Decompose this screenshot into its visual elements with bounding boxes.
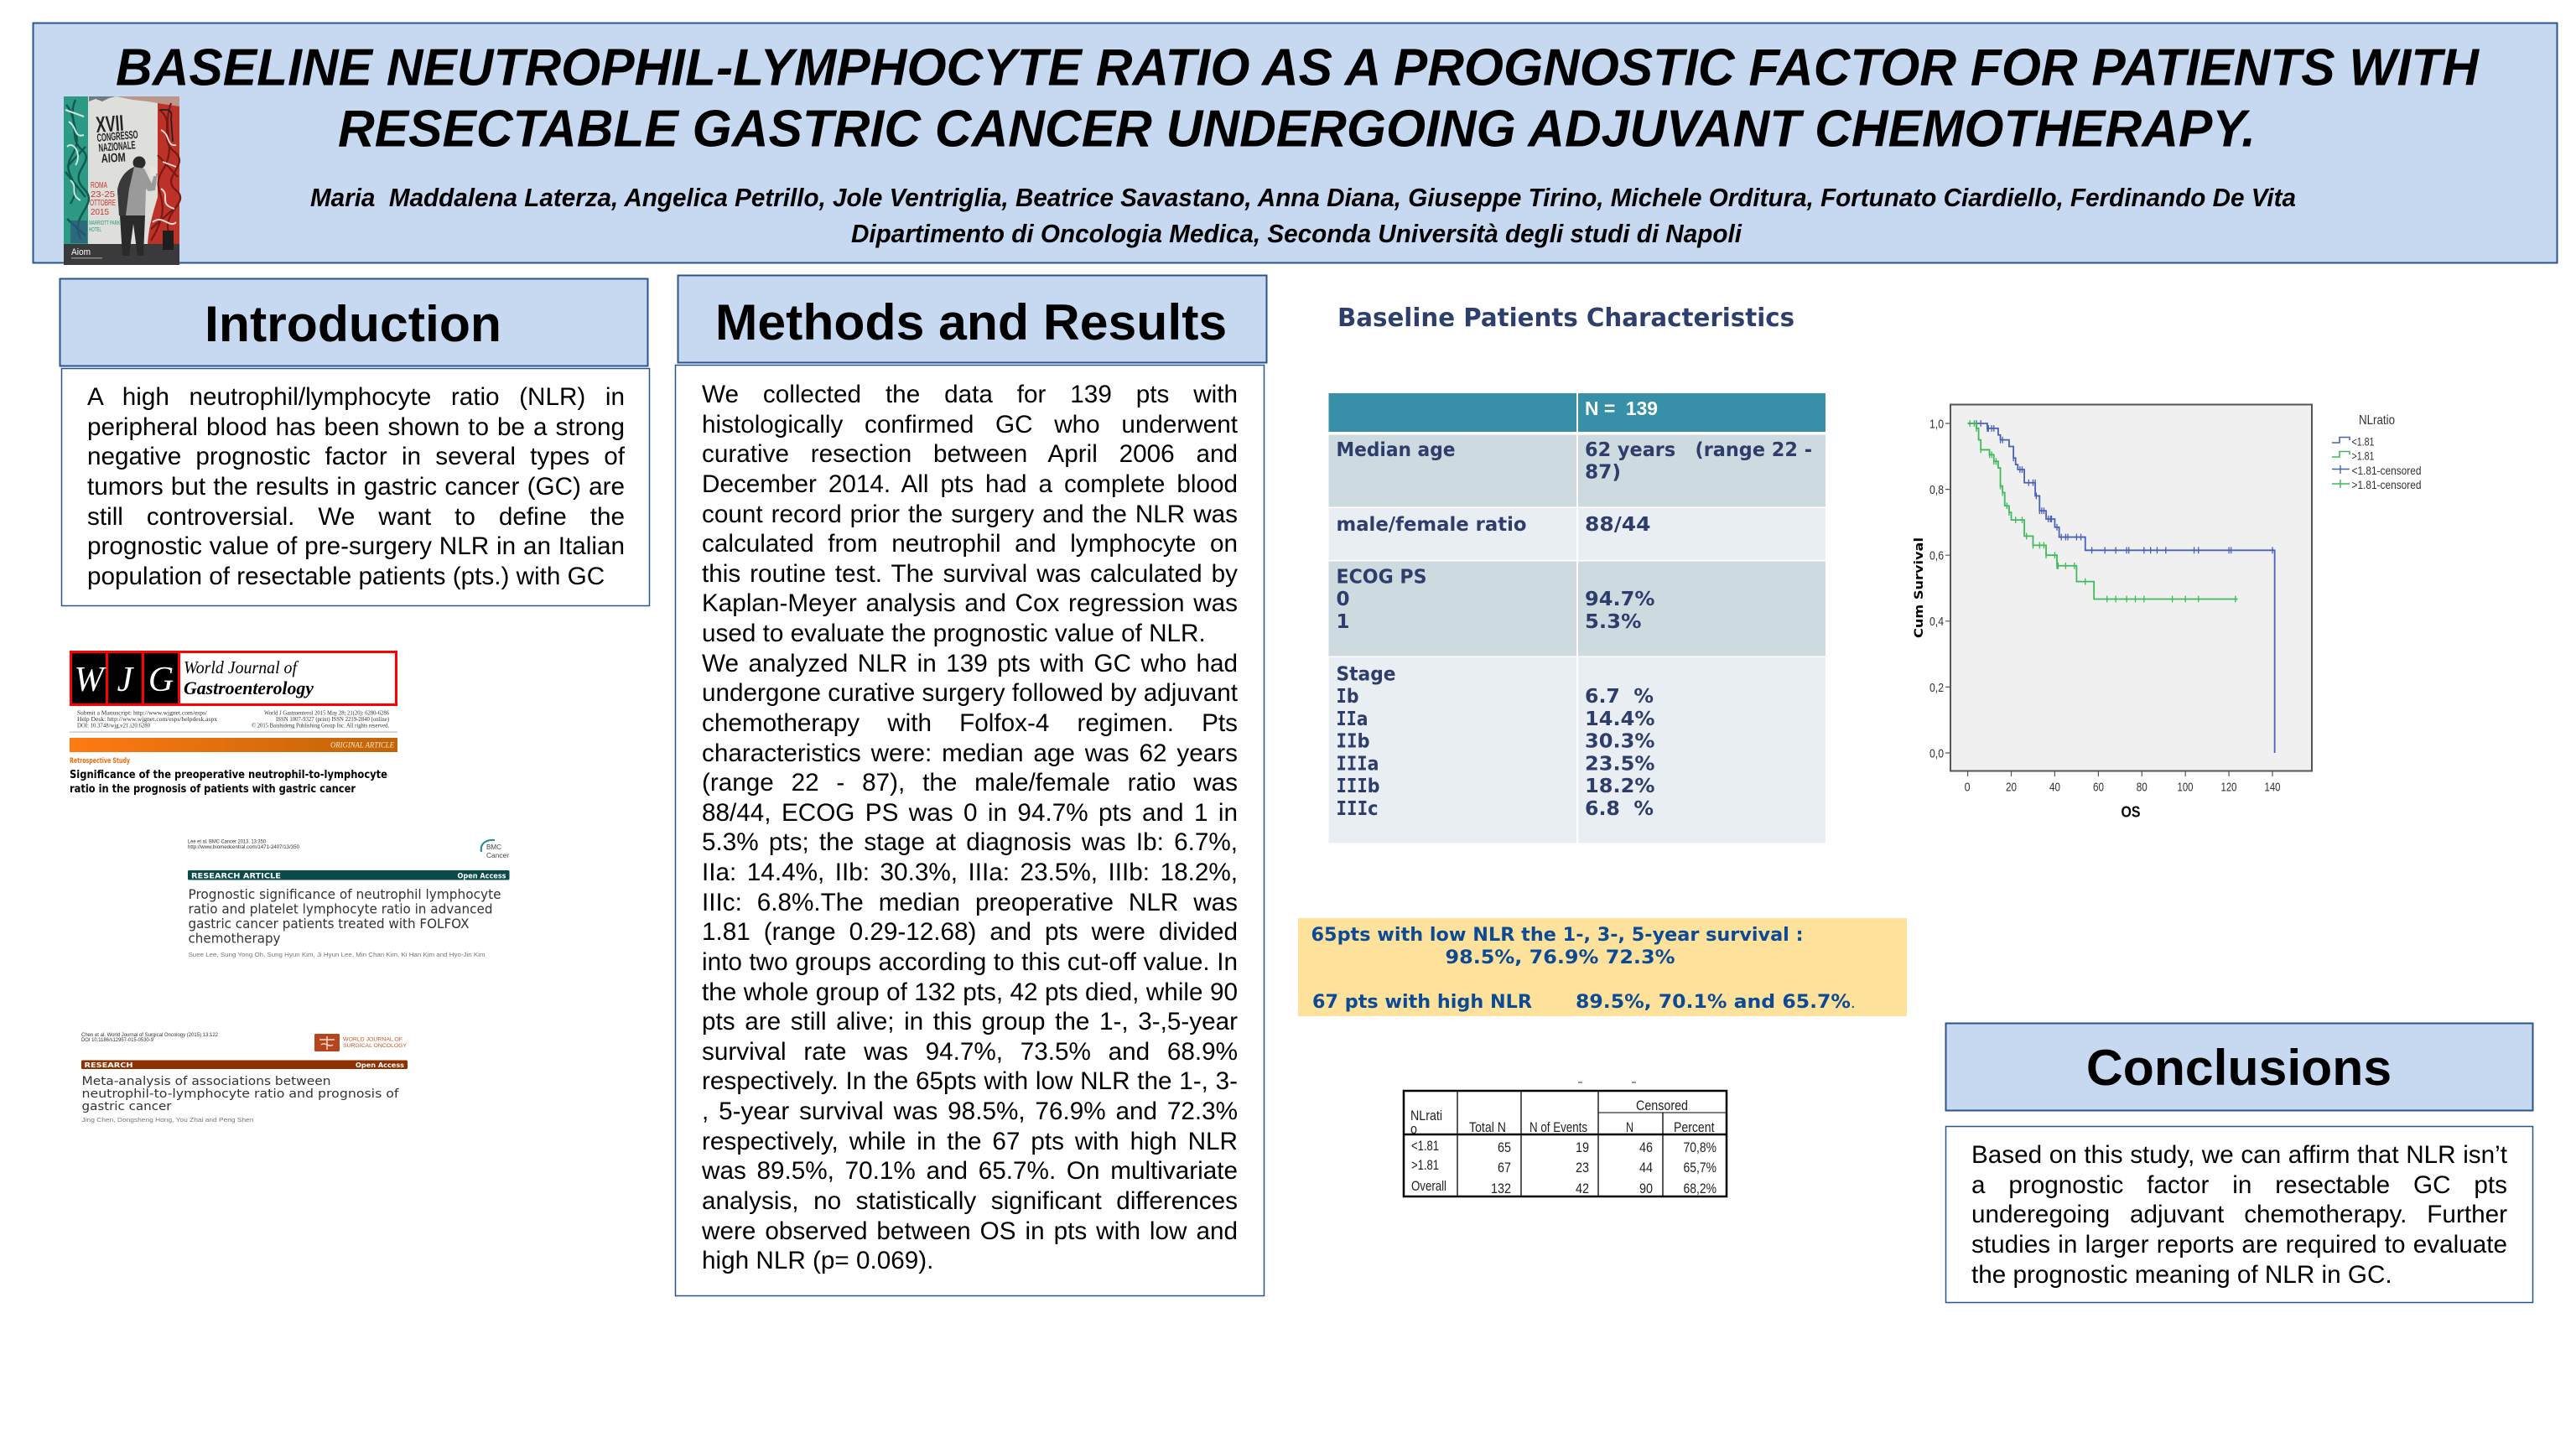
text: methods and results body: We collected the data for 139 pts with bbox=[702, 381, 1238, 408]
text: conclusions body: Based on this study, we can affirm that NLR isn’t bbox=[1971, 1141, 2507, 1169]
y axis labels: 0,6 bbox=[1929, 548, 1944, 563]
journal clipping: World Journal of Surgical Oncology: Chen et al. World Journal of Surgical Oncology (2015) 13:122 bbox=[81, 1033, 219, 1038]
text: methods and results body: this routine test. The survival was calculated by bbox=[702, 560, 1238, 588]
journal clipping: World Journal of Gastroenterology: ISSN 1007-9327 (print) ISSN 2219-2840 (online) bbox=[276, 715, 389, 723]
poster lettering: NAZIONALE bbox=[98, 138, 136, 154]
text: methods and results body: chemotherapy with Folfox-4 regimen. Pts bbox=[702, 709, 1238, 737]
journal clipping: World Journal of Surgical Oncology: WORLD JOURNAL OF bbox=[343, 1036, 402, 1043]
text: methods and results body: pts are still alive; in this group the 1-, 3-,5-year bbox=[702, 1008, 1238, 1035]
callout: survival by NLR bbox=[1298, 918, 1907, 1016]
table: censored summary: 90 bbox=[1639, 1181, 1653, 1196]
table: censored summary: Total N bbox=[1469, 1119, 1506, 1135]
journal clipping: World Journal of Surgical Oncology: gastric cancer bbox=[82, 1100, 172, 1113]
text: methods and results body: analysis, no statistically significant differences bbox=[702, 1187, 1238, 1215]
curve: NLR below 1.81 bbox=[1968, 420, 2275, 753]
panel: conclusions text box bbox=[1945, 1127, 2532, 1303]
x axis labels: 120 bbox=[2220, 780, 2237, 795]
table: censored summary: 132 bbox=[1491, 1181, 1511, 1196]
table: censored summary: o bbox=[1410, 1121, 1417, 1137]
journal clipping: BMC Cancer bbox=[188, 838, 510, 958]
text: introduction body: tumors but the results in gastric cancer (GC) are bbox=[87, 473, 625, 501]
table: baseline patient characteristics: 6.7 % bbox=[1585, 686, 1654, 708]
text: introduction body: negative prognostic factor in several types of bbox=[87, 443, 625, 470]
journal clipping: BMC Cancer: http://www.biomedcentral.com/1471-2407/13/350 bbox=[188, 844, 299, 850]
congress poster image: 23-25 bbox=[91, 189, 115, 200]
journal clipping: World Journal of Surgical Oncology: DOI 10.1186/s12957-015-0530-9 bbox=[81, 1038, 154, 1043]
x axis labels: 100 bbox=[2177, 780, 2194, 795]
text: introduction body: population of resectable patients (pts.) with GC bbox=[87, 563, 605, 590]
icon: BMC logo: BMC bbox=[486, 843, 501, 851]
text: methods and results body: used to evaluate the prognostic value of NLR. bbox=[702, 620, 1206, 647]
chart legend bbox=[2332, 413, 2422, 491]
table: baseline patient characteristics: Stage bbox=[1337, 664, 1395, 686]
text: conclusions body: a prognostic factor in resectable GC pts bbox=[1971, 1171, 2507, 1199]
chart legend: NLratio bbox=[2359, 413, 2395, 428]
table: baseline patient characteristics: IIIc bbox=[1337, 798, 1379, 820]
panel: introduction heading: Introduction bbox=[205, 295, 501, 352]
table: censored summary: 42 bbox=[1576, 1181, 1589, 1196]
title bbox=[116, 39, 2480, 158]
journal clipping: World Journal of Gastroenterology: ratio in the prognosis of patients with gastric cancer bbox=[70, 783, 356, 796]
congress poster image bbox=[64, 96, 180, 265]
text: methods and results body: 5.3% pts; the stage at diagnosis was Ib: 6.7%, bbox=[702, 828, 1238, 856]
congress poster image: HOTEL bbox=[89, 227, 101, 233]
chart legend: <1.81 bbox=[2351, 434, 2375, 448]
figure painting wall bbox=[117, 156, 158, 256]
text: introduction body: prognostic value of pre-surgery NLR in an Italian bbox=[87, 532, 625, 560]
journal clipping: World Journal of Gastroenterology: Significance of the preoperative neutrophil-to-lymphocyte bbox=[70, 769, 387, 781]
table: baseline patient characteristics: IIIa bbox=[1337, 753, 1379, 775]
text: methods and results body: histologically confirmed GC who underwent bbox=[702, 411, 1238, 439]
journal clipping: World Journal of Surgical Oncology: neutrophil-to-lymphocyte ratio and prognosis of bbox=[82, 1087, 400, 1101]
text: methods and results body: was 89.5%, 70.1% and 65.7%. On multivariate bbox=[702, 1157, 1238, 1185]
table: censored summary: 46 bbox=[1639, 1139, 1653, 1155]
text: introduction body: peripheral blood has been shown to be a strong bbox=[87, 413, 625, 441]
text: methods and results body: the whole group of 132 pts, 42 pts died, while 90 bbox=[702, 978, 1238, 1006]
journal clipping: World Journal of Surgical Oncology: RESEARCH bbox=[84, 1061, 132, 1069]
table: censored summary: Overall bbox=[1411, 1178, 1446, 1194]
panel: methods and results heading: Methods and Results bbox=[715, 293, 1227, 350]
journal clipping: BMC Cancer: RESEARCH ARTICLE bbox=[191, 872, 281, 880]
icon: BMC logo bbox=[481, 840, 509, 859]
poster lettering: CONGRESSO bbox=[96, 128, 138, 144]
table: baseline patient characteristics: 18.2% bbox=[1585, 776, 1655, 797]
text: conclusions body: studies in larger reports are required to evaluate bbox=[1971, 1231, 2507, 1259]
table: baseline patient characteristics: 30.3% bbox=[1585, 731, 1655, 753]
y axis title: Cum Survival bbox=[1913, 537, 1926, 638]
text: methods and results body: were observed between OS in pts with low and bbox=[702, 1217, 1238, 1244]
text: methods and results body bbox=[702, 381, 1238, 1274]
table: censored summary: 67 bbox=[1498, 1160, 1511, 1176]
title: BASELINE NEUTROPHIL-LYMPHOCYTE RATIO AS A PROGNOSTIC FACTOR FOR PATIENTS WITH bbox=[116, 39, 2480, 97]
table: baseline patient characteristics: 87) bbox=[1585, 461, 1621, 483]
text: introduction body: still controversial. We want to define the bbox=[87, 503, 625, 530]
x axis labels: 20 bbox=[2006, 780, 2017, 795]
table: baseline patient characteristics: 6.8 % bbox=[1585, 798, 1654, 820]
panel: conclusions heading bbox=[1945, 1023, 2532, 1110]
congress poster image: MARRIOTT PARK bbox=[89, 221, 120, 226]
table: baseline patient characteristics: 88/44 bbox=[1585, 514, 1650, 536]
y axis labels: 0,2 bbox=[1929, 681, 1944, 695]
poster lettering bbox=[95, 111, 138, 166]
callout: survival by NLR: 67 pts with high NLR bbox=[1312, 992, 1532, 1013]
heading: baseline patients characteristics: Baseline Patients Characteristics bbox=[1337, 304, 1794, 333]
text: methods and results body: count record prior the surgery and the NLR was bbox=[702, 500, 1238, 528]
curve: NLR above 1.81 bbox=[1968, 420, 2238, 602]
table: baseline patient characteristics: Median age bbox=[1337, 439, 1456, 461]
text: methods and results body: 88/44, ECOG PS was 0 in 94.7% pts and 1 in bbox=[702, 799, 1238, 827]
text: introduction body: A high neutrophil/lymphocyte ratio (NLR) in bbox=[87, 383, 625, 411]
text: methods and results body: high NLR (p= 0.069). bbox=[702, 1247, 933, 1274]
table: censored summary: N bbox=[1626, 1119, 1633, 1135]
journal clipping: BMC Cancer: gastric cancer patients treated with FOLFOX bbox=[188, 916, 470, 932]
text: methods and results body: into two groups according to this cut-off value. In bbox=[702, 948, 1238, 976]
journal clipping: World Journal of Gastroenterology: © 2015 Baishideng Publishing Group Inc. All rights reserved. bbox=[252, 721, 389, 729]
y axis labels: 0,8 bbox=[1929, 483, 1944, 497]
poster lettering: XVII bbox=[95, 111, 124, 138]
text: methods and results body: respectively, while in the 67 pts with high NLR bbox=[702, 1128, 1238, 1155]
text: methods and results body: We analyzed NLR in 139 pts with GC who had bbox=[702, 650, 1238, 677]
authors: Maria Maddalena Laterza, Angelica Petrillo, Jole Ventriglia, Beatrice Savastano, Anna Diana, Giuseppe Tirino, Michele Orditura, Fortunato Ciardiello, Ferdinando De Vita bbox=[310, 184, 2296, 212]
table: baseline patient characteristics: IIb bbox=[1337, 731, 1370, 753]
table: baseline patient characteristics bbox=[1328, 393, 1826, 843]
table: baseline patient characteristics: 14.4% bbox=[1585, 708, 1655, 730]
journal clipping: World Journal of Gastroenterology: Retrospective Study bbox=[70, 757, 130, 766]
table: censored summary: Percent bbox=[1674, 1119, 1715, 1135]
table: censored summary: 68,2% bbox=[1684, 1181, 1716, 1196]
icon: journal crest bbox=[314, 1034, 340, 1051]
congress poster image: 2015 bbox=[91, 207, 109, 217]
journal clipping: BMC Cancer: Prognostic significance of neutrophil lymphocyte bbox=[188, 886, 501, 902]
header banner bbox=[34, 23, 2558, 263]
journal clipping: World Journal of Gastroenterology: J bbox=[117, 661, 135, 699]
journal clipping: World Journal of Gastroenterology: ORIGINAL ARTICLE bbox=[330, 741, 394, 750]
callout: survival by NLR: 65pts with low NLR the 1-, 3-, 5-year survival : bbox=[1311, 925, 1803, 946]
journal clipping: BMC Cancer: Suee Lee, Sung Yong Oh, Sung Hyun Kim, Ji Hyun Lee, Min Chan Kim, Ki Han Kim and Hyo-Jin Kim bbox=[188, 951, 485, 958]
text: conclusions body bbox=[1971, 1141, 2507, 1288]
y axis labels: 0,0 bbox=[1929, 746, 1944, 761]
journal clipping: World Journal of Gastroenterology: DOI: 10.3748/wjg.v21.i20.6280 bbox=[77, 721, 150, 729]
table: censored summary: 23 bbox=[1576, 1160, 1589, 1176]
x axis labels bbox=[1965, 780, 2281, 795]
panel: methods and results heading bbox=[678, 275, 1266, 362]
panel: methods and results text box bbox=[676, 366, 1265, 1296]
journal clipping: World Journal of Gastroenterology: Help Desk: http://www.wjgnet.com/esps/helpdesk.aspx bbox=[77, 715, 217, 723]
table: baseline patient characteristics: 94.7% bbox=[1585, 589, 1655, 610]
callout: survival by NLR: 89.5%, 70.1% and 65.7% bbox=[1576, 992, 1851, 1013]
table: baseline patient characteristics: IIIb bbox=[1337, 776, 1380, 797]
y axis labels: 0,4 bbox=[1929, 615, 1944, 629]
affiliation: Dipartimento di Oncologia Medica, Seconda Università degli studi di Napoli bbox=[851, 220, 1742, 248]
journal clipping: BMC Cancer: ratio and platelet lymphocyte ratio in advanced bbox=[188, 900, 493, 917]
text: methods and results body: IIa: 14.4%, IIb: 30.3%, IIIa: 23.5%, IIIb: 18.2%, bbox=[702, 859, 1238, 886]
journal clipping: World Journal of Surgical Oncology: Jing Chen, Dongsheng Hong, You Zhai and Peng Shen bbox=[82, 1116, 253, 1124]
poster lettering: AIOM bbox=[101, 151, 126, 166]
table: censored summary: 44 bbox=[1639, 1160, 1653, 1176]
x axis labels: 60 bbox=[2093, 780, 2104, 795]
text: methods and results body: December 2014. All pts had a complete blood bbox=[702, 470, 1238, 498]
text: methods and results body: calculated from neutrophil and lymphocyte on bbox=[702, 530, 1238, 558]
table: baseline patient characteristics: IIa bbox=[1337, 708, 1368, 730]
title: RESECTABLE GASTRIC CANCER UNDERGOING ADJUVANT CHEMOTHERAPY. bbox=[338, 101, 2256, 158]
panel: conclusions heading: Conclusions bbox=[2086, 1039, 2392, 1096]
table: baseline patient characteristics: 5.3% bbox=[1585, 611, 1642, 633]
journal clipping: World Journal of Gastroenterology: W bbox=[74, 661, 107, 699]
y axis labels bbox=[1929, 418, 1944, 761]
journal clipping: BMC Cancer: Lee et al. BMC Cancer 2013, 13:350 bbox=[188, 838, 266, 845]
table: baseline patient characteristics: 62 years (range 22 - bbox=[1585, 439, 1812, 461]
text: conclusions body: the prognostic meaning of NLR in GC. bbox=[1971, 1261, 2392, 1288]
text: conclusions body: underegoing adjuvant chemotherapy. Further bbox=[1971, 1201, 2507, 1228]
text: methods and results body: 1.81 (range 0.29-12.68) and pts were divided bbox=[702, 918, 1238, 946]
panel: introduction text box bbox=[62, 369, 649, 605]
table: censored summary: N of Events bbox=[1530, 1119, 1587, 1135]
x axis title: OS bbox=[2122, 803, 2140, 820]
text: methods and results body: characteristics were: median age was 62 years bbox=[702, 740, 1238, 766]
congress poster image: ROMA bbox=[91, 180, 107, 190]
table: censored summary: 70,8% bbox=[1684, 1139, 1716, 1155]
x axis labels: 140 bbox=[2264, 780, 2281, 795]
journal clipping: World Journal of Gastroenterology: World Journal of bbox=[184, 657, 299, 677]
journal clipping: World Journal of Gastroenterology bbox=[70, 652, 397, 796]
table: censored summary: Censored bbox=[1636, 1098, 1688, 1113]
chart legend: <1.81-censored bbox=[2351, 464, 2422, 477]
text: methods and results body: undergone curative surgery followed by adjuvant bbox=[702, 679, 1238, 707]
chart: Kaplan-Meier survival curves bbox=[1913, 404, 2422, 820]
icon: BMC logo: Cancer bbox=[486, 851, 509, 859]
table: baseline patient characteristics: N = 139 bbox=[1585, 397, 1658, 419]
journal clipping: World Journal of Surgical Oncology: Meta-analysis of associations between bbox=[82, 1075, 330, 1088]
journal clipping: World Journal of Gastroenterology: G bbox=[148, 661, 174, 699]
text: methods and results body: (range 22 - 87), the male/female ratio was bbox=[702, 769, 1238, 797]
table: baseline patient characteristics: 1 bbox=[1337, 611, 1350, 633]
x axis labels: 0 bbox=[1965, 780, 1971, 795]
callout: survival by NLR: 98.5%, 76.9% 72.3% bbox=[1446, 947, 1675, 968]
congress poster image: Aiom bbox=[71, 247, 91, 257]
text: methods and results body: Kaplan-Meyer analysis and Cox regression was bbox=[702, 589, 1238, 617]
journal clipping: World Journal of Gastroenterology: World J Gastroenterol 2015 May 28; 21(20): 6280-6286 bbox=[264, 709, 389, 716]
text: introduction body bbox=[87, 383, 626, 590]
table: censored summary: >1.81 bbox=[1411, 1157, 1439, 1173]
y axis labels: 1,0 bbox=[1929, 418, 1944, 431]
journal clipping: BMC Cancer: chemotherapy bbox=[188, 931, 280, 946]
table: baseline patient characteristics: Ib bbox=[1337, 686, 1358, 708]
journal clipping: World Journal of Surgical Oncology: Open Access bbox=[356, 1061, 404, 1069]
x axis labels: 40 bbox=[2049, 780, 2060, 795]
journal clipping: World Journal of Surgical Oncology: SURGICAL ONCOLOGY bbox=[343, 1043, 408, 1049]
table: baseline patient characteristics: 23.5% bbox=[1585, 753, 1655, 775]
journal clipping: World Journal of Gastroenterology: Submit a Manuscript: http://www.wjgnet.com/esps/ bbox=[77, 709, 208, 716]
chart legend: >1.81 bbox=[2351, 449, 2375, 463]
journal clipping: World Journal of Surgical Oncology bbox=[81, 1033, 408, 1124]
x axis labels: 80 bbox=[2137, 780, 2148, 795]
table: baseline patient characteristics: 0 bbox=[1337, 589, 1350, 610]
text: methods and results body: curative resection between April 2006 and bbox=[702, 440, 1238, 468]
text: methods and results body: , 5-year survival was 98.5%, 76.9% and 72.3% bbox=[702, 1098, 1238, 1125]
table: baseline patient characteristics: male/female ratio bbox=[1337, 514, 1526, 536]
table: censored summary: <1.81 bbox=[1411, 1138, 1439, 1154]
table: censored summary: 19 bbox=[1576, 1139, 1589, 1155]
table: baseline patient characteristics: ECOG PS bbox=[1337, 567, 1427, 589]
callout: survival by NLR: . bbox=[1851, 994, 1856, 1012]
table: censored summary: NLrati bbox=[1410, 1108, 1442, 1124]
table: censored summary: 65 bbox=[1498, 1139, 1511, 1155]
journal clipping: World Journal of Gastroenterology: Gastroenterology bbox=[184, 677, 314, 698]
table: censored summary: 65,7% bbox=[1684, 1160, 1716, 1176]
journal clipping: BMC Cancer: Open Access bbox=[458, 872, 506, 880]
text: methods and results body: respectively. In the 65pts with low NLR the 1-, 3- bbox=[702, 1067, 1238, 1095]
chart legend: >1.81-censored bbox=[2351, 478, 2422, 491]
text: methods and results body: survival rate was 94.7%, 73.5% and 68.9% bbox=[702, 1038, 1238, 1066]
panel: introduction heading bbox=[60, 278, 647, 366]
table: censored summary bbox=[1404, 1082, 1727, 1196]
text: methods and results body: IIIc: 6.8%.The median preoperative NLR was bbox=[702, 889, 1238, 916]
congress poster image: OTTOBRE bbox=[90, 198, 116, 208]
